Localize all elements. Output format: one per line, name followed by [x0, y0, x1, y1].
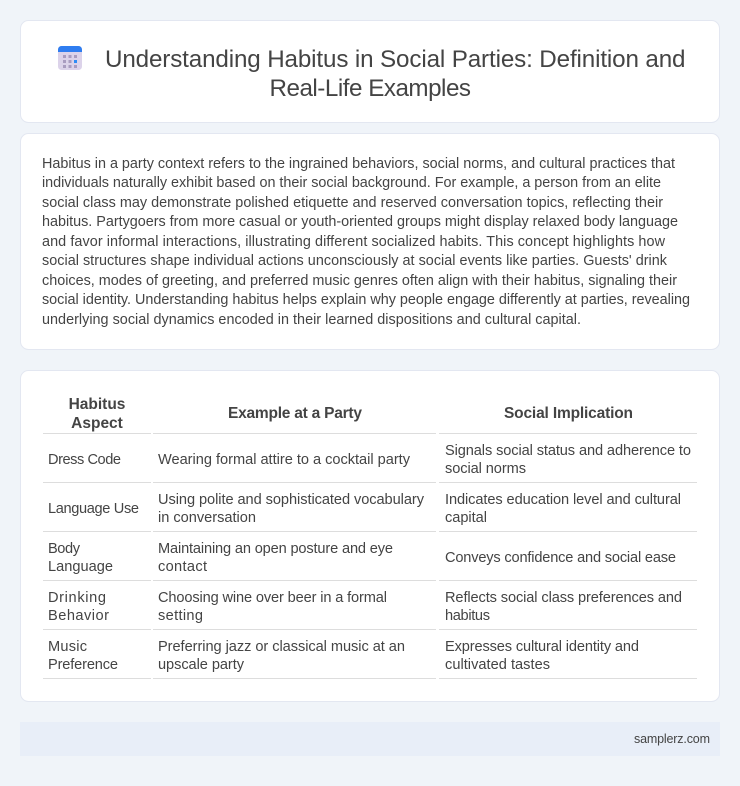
row: language use [48, 492, 681, 526]
row: drinking behavior: Choosing wine over beer in a formal [158, 590, 387, 606]
icon: calendar [58, 46, 82, 70]
row: dress code [48, 443, 691, 477]
row: drinking behavior: habitus [445, 608, 490, 624]
footer: samplerz.com [634, 732, 710, 746]
row: body language: Body [48, 541, 81, 557]
footer [20, 722, 720, 756]
table header: Example at a Party [228, 405, 362, 422]
row: drinking behavior: Behavior [48, 608, 109, 624]
title: Understanding Habitus in Social Parties: Definition and [105, 46, 686, 73]
row: body language: Conveys confidence and social ease [445, 550, 676, 566]
panel: header [20, 20, 720, 122]
title [105, 46, 686, 102]
row: drinking behavior: Drinking [48, 590, 106, 606]
text block: habitus definition: habitus. Partygoers from more casual or youth-oriented groups might display relaxed body language [42, 214, 678, 230]
row: body language: Language [48, 559, 113, 575]
row: dress code: Dress Code [48, 452, 121, 468]
text block: habitus definition: underlying social dynamics encoded in their learned dispositions and cultural capital. [42, 312, 581, 328]
row: body language: Maintaining an open posture and eye [158, 541, 393, 557]
panel: description [20, 134, 720, 350]
row: dress code: social norms [445, 461, 526, 477]
text block: habitus definition: social identity. Understanding habitus helps explain why people engage differently at parties, revealing [42, 292, 690, 308]
row: language use: Language Use [48, 501, 139, 517]
table header [69, 396, 633, 432]
row: music preference: Expresses cultural identity and [445, 639, 639, 655]
text block: habitus definition: social structures shape individual actions unconsciously at social events like parties. Guests' drink [42, 253, 668, 269]
row: music preference: upscale party [158, 657, 245, 673]
table header: Habitus [69, 396, 125, 413]
row: body language: contact [158, 559, 207, 575]
text block: habitus definition: choices, modes of greeting, and preferred music genres often align with their habitus, signaling their [42, 273, 677, 289]
row: music preference: Music [48, 639, 87, 655]
row: music preference: Preferring jazz or classical music at an [158, 639, 405, 655]
table header: Aspect [71, 415, 123, 432]
row: language use: capital [445, 510, 487, 526]
text block: habitus definition [42, 156, 690, 328]
row: dress code: Signals social status and adherence to [445, 443, 691, 459]
row: drinking behavior: Reflects social class preferences and [445, 590, 682, 606]
text block: habitus definition: and favor informal interactions, illustrating different socialized habits. This concept highlights how [42, 234, 666, 250]
row: dress code: Wearing formal attire to a cocktail party [158, 452, 411, 468]
row: music preference [48, 639, 639, 673]
row: language use: Using polite and sophisticated vocabulary [158, 492, 425, 508]
panel: habitus table [20, 370, 720, 702]
row: drinking behavior [48, 590, 682, 624]
text block: habitus definition: individuals naturally exhibit based on their social background. For example, a person from an elite [42, 175, 661, 191]
row: drinking behavior: setting [158, 608, 203, 624]
row: language use: Indicates education level and cultural [445, 492, 681, 508]
row: music preference: Preference [48, 657, 118, 673]
text block: habitus definition: Habitus in a party context refers to the ingrained behaviors, social norms, and cultural practices that [42, 156, 675, 172]
title: Real-Life Examples [270, 75, 471, 102]
row: body language [48, 541, 676, 575]
text block: habitus definition: social class may demonstrate polished etiquette and reserved conversation topics, reflecting their [42, 195, 663, 211]
row: language use: in conversation [158, 510, 256, 526]
row: music preference: cultivated tastes [445, 657, 550, 673]
table header: Social Implication [504, 405, 633, 422]
